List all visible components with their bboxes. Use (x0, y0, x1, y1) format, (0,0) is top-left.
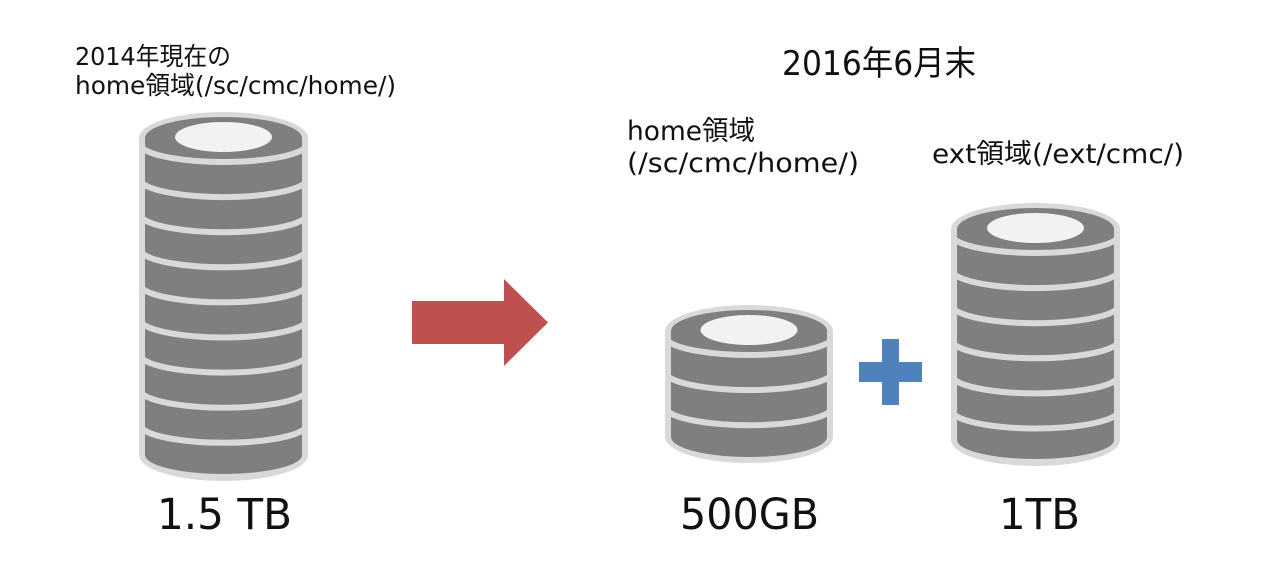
arrow: transition (412, 279, 548, 366)
label: home area: (/sc/cmc/home/) (627, 148, 859, 179)
value: 1TB: 1TB (999, 490, 1080, 540)
icon: plus sign (859, 339, 922, 405)
value: 500GB: 500GB (680, 490, 819, 540)
icon: database stack 500GB (665, 305, 833, 463)
icon: database stack 1.5 TB (139, 112, 308, 481)
label: home area (627, 116, 859, 179)
value: 1.5 TB: 1.5 TB (157, 490, 292, 540)
heading: 2014 home area: 2014年現在の (75, 42, 231, 71)
heading: 2014 home area: home領域(/sc/cmc/home/) (75, 71, 396, 100)
heading: 2016 June: 2016年6月末 (782, 44, 976, 84)
label: home area: home領域 (627, 116, 755, 147)
label: ext area: ext領域(/ext/cmc/) (932, 139, 1184, 170)
icon: database stack 1TB (951, 203, 1120, 466)
heading: 2014 home area (75, 42, 396, 100)
